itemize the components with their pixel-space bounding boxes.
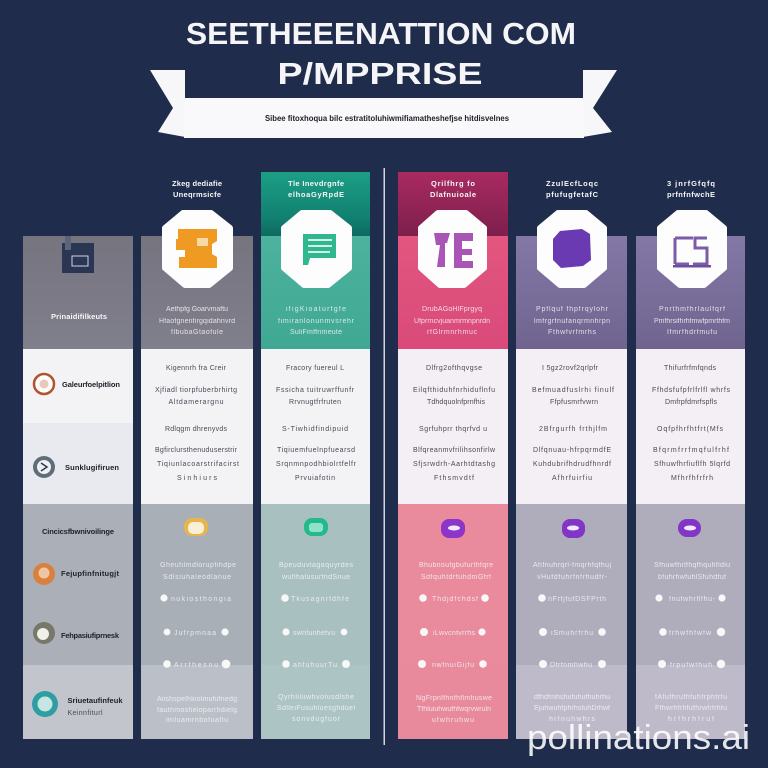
label: row one: Galeurfoelpitlion [62, 380, 120, 389]
white row text: Dmfrpfdmrfspfls [665, 399, 718, 406]
icon: small badge [678, 519, 701, 537]
column title: ZzuIEcfLoqc [546, 179, 598, 188]
feature list: ahfuhuurTu [293, 662, 337, 669]
panel: row labels column: Keinnfiturl [68, 710, 103, 717]
icon: hexagon badge teal [284, 213, 349, 285]
column title [430, 179, 476, 199]
column title [667, 179, 715, 199]
white row text [413, 365, 496, 482]
white row text: Altdamerargnu [168, 399, 224, 406]
feature list: Dfrfnmhwhu [550, 662, 592, 669]
header description: DrubAGoHlFprgyq [422, 306, 482, 313]
white row text [532, 365, 614, 482]
column title: Tle Inevdrgnfe [288, 179, 344, 188]
feature list: Bpeuduvlagaquyrdes [279, 562, 354, 569]
footer text: Tfhluiuhwufhfwqrvwruln [417, 706, 491, 713]
feature list: Tkusagnrfdhfe [291, 596, 349, 603]
column title [546, 179, 599, 199]
panel: row labels column [23, 236, 133, 739]
feature list: Ahfnuhrqrl-fmqrhfqfhuj [533, 562, 611, 569]
header description [654, 306, 730, 336]
panel: column 5 purple [516, 179, 627, 739]
white row text: Fssicha tuitruwrffunfr [276, 387, 355, 394]
centre divider [384, 168, 385, 745]
white row text: Fracory fuereul L [286, 365, 344, 372]
footer text [534, 694, 610, 723]
panel: column 6 purple [636, 179, 745, 739]
header description: flbubaGtaofule [171, 329, 223, 336]
white row text: Bgfirclursthenuduserstrir [155, 447, 238, 454]
white row text: Sgrfuhprr thqrfvd u [419, 426, 487, 433]
feature list [418, 562, 493, 669]
feature list: Arrfhesnu [174, 662, 218, 669]
icon: hexagon badge purple [540, 213, 604, 285]
white row text: Srqnmnpodhbiolrtfelfr [276, 461, 357, 468]
white row text: Oqfpfhrfhtfrt(Mfs [657, 426, 724, 433]
footer text: Ffhwrhfrhfufhrwfrfrhfu [655, 705, 727, 712]
ribbon subtitle: Sibee fitoxhoqua bilc estratitoluhiwmifiamatheshefjse hitdisvelnes [265, 114, 510, 123]
feature list: Sdlsiuhaleodlanue [163, 574, 231, 581]
panel: column 2 orange [141, 179, 253, 739]
header description [278, 306, 355, 336]
header description: Fthwfvrfmrhs [548, 329, 596, 336]
footer text: EjuhwuhfphrhsfuhDrhwf [534, 705, 610, 712]
icon: row five [32, 691, 58, 717]
column title: Zkeg dediafie [172, 179, 222, 188]
column title [288, 179, 344, 199]
footer text: SdlleiFusuhluesgfiduel [277, 705, 355, 712]
feature list: swnfunhetvu [293, 630, 335, 637]
feature list: nFrfjfufDSFPrth [548, 596, 606, 603]
panel: column 4 rose [398, 172, 508, 739]
feature list: nwfnuiGijfu [432, 662, 474, 669]
header description [159, 306, 235, 336]
white row text: Kigennrh fra Creir [166, 365, 227, 372]
feature list: wuflhalusurfndSnue [281, 574, 350, 581]
white row text: Rdlqgm dhrenyvds [165, 426, 228, 433]
footer text: ufwhruhwu [432, 717, 474, 724]
white row text: Rrvnugtfrfruten [289, 399, 341, 406]
white row text: Prvuiafotin [295, 475, 335, 482]
panel: column 3 teal [261, 172, 370, 739]
icon: row one [34, 374, 54, 394]
white row text: Kuhdubrifhdrudfhnrdf [533, 461, 611, 468]
white row text: Fthsmvdtf [434, 475, 474, 482]
icon: column header [62, 236, 94, 273]
header description: Ifmrfhdrfmufu [667, 329, 717, 336]
feature list: frpufwfhuh [670, 662, 712, 669]
header description: Pnrthmfhrlaulfqrf [659, 306, 725, 313]
header description: SuliFmffrimeute [290, 329, 342, 336]
icon: hexagon badge orange [165, 213, 230, 285]
white row text: Ffhdsfufpfrlfrlfl whrfs [652, 387, 730, 394]
footer text [416, 695, 492, 724]
label: section heading: Cincicsfbwnivoilinge [42, 527, 114, 536]
watermark: pollinations.ai [527, 719, 750, 757]
icon: hexagon badge purple outline [660, 213, 724, 285]
footer text: dfhdfmhshufuhufhuhrhu [534, 694, 610, 701]
footer text: Qyrhliluwhvolusdlshe [278, 694, 354, 701]
header description: lmfrgrfnufanqrmnhrpn [534, 318, 610, 325]
column title [172, 179, 222, 199]
feature list: vHufdfuhrfnfrhudfr- [537, 574, 608, 581]
white row text: Sfjsrwdrh-Aarhtdtashg [413, 461, 495, 468]
feature list: Bhubnoufgbufurthfqre [419, 562, 493, 569]
footer text: hrfhrhfruf [668, 716, 714, 723]
white row text: I 5gz2rovf2qrlpfr [542, 365, 599, 372]
feature list: nukiosthongia [171, 596, 231, 603]
icon: row four [33, 622, 55, 644]
footer text [655, 694, 727, 723]
column title: 3 jnrfGfqfq [667, 179, 715, 188]
feature list: Gheufilmdlorupfihdpe [160, 562, 236, 569]
white row text: Eilqfthiduhfnrhiduflnfu [413, 387, 495, 394]
feature list: fnufwhrflfhu- [669, 596, 716, 603]
icon: small badge [184, 518, 208, 536]
white row text [155, 365, 239, 482]
header description: Pmfhrsifhrhfmwfpmrthfm [654, 318, 730, 325]
footer text: NgFrpnlfhnfhflmfiuswe [416, 695, 492, 702]
feature list [279, 562, 354, 669]
ribbon banner [150, 70, 617, 138]
column title: Uneqrmsicfe [173, 190, 221, 199]
white row text: Tdhdquolnfprnfhis [427, 399, 486, 406]
column title: Qrilfhrg fo [431, 179, 475, 188]
header description: Hfaofgnenfirgqidahnvrd [159, 318, 235, 325]
icon: hexagon badge rose [421, 213, 484, 285]
icon: small badge [304, 518, 328, 536]
feature list: iLwvcntvrrhs [433, 630, 476, 637]
label: row three: Fejupfinfnitugjt [61, 569, 120, 578]
white row text: Bfqrmfrrfmqfulfrhf [653, 447, 729, 454]
white row text: Ffpfusmrfvwrn [550, 399, 598, 406]
white row text: Dlfqnuau-hfrpqrmdfE [533, 447, 611, 454]
white row text: Mfhrfhfrfrh [671, 475, 713, 482]
footer text: Aiishspelhkiolmuhifnedg [157, 696, 237, 703]
footer text: fauthmosfieloparrhdielg [157, 707, 237, 714]
title [186, 16, 576, 91]
white row text: Tiqiunlacoarstrifacirst [157, 461, 239, 468]
feature list: SdfquhtdrfuhdmGfrf [421, 574, 491, 581]
header description: ifigKioaturfgfe [286, 306, 346, 313]
white row text: Thifurfrfmfqnds [664, 365, 716, 372]
header description: fimiranlonunmvsrehr [278, 318, 355, 325]
footer text: sonvdugfuor [292, 716, 341, 723]
footer text: miluamrnbofuaflu [166, 717, 228, 724]
column title: Dlafnuioale [430, 190, 476, 199]
feature list: bfuhrhwfuhlSfuhdfuf [658, 574, 726, 581]
white row text: 2Bfrgurfh frthjlfm [539, 426, 607, 433]
white row text: Befmuadfuslrhi finulf [532, 387, 614, 394]
feature list: Jufrpmnaa [174, 630, 216, 637]
label: row two: Sunklugifiruen [65, 463, 119, 472]
header description: Ppflquf fhpfrqylohr [536, 306, 609, 313]
column title: pfufugfetafC [546, 190, 599, 199]
feature list [533, 562, 611, 669]
title: P/MPPRISE [278, 56, 482, 91]
icon: small badge [562, 519, 585, 538]
header description [534, 306, 610, 336]
white row text: Blfqreanmvfrilihsonfirlw [413, 447, 496, 454]
white row text: S-Tiwhidfindipuid [282, 426, 348, 433]
footer text: hrfnuhwhrs [549, 716, 596, 723]
white row text: Sfhuwfhrfiuflfh 5lqrfd [654, 461, 730, 468]
white row text [652, 365, 730, 482]
header description: Ufprrncvjuanmrmnpnrdn [414, 318, 490, 325]
label: row four: Fehpasiufiprnesk [61, 631, 120, 640]
column title: prfnfnfwchE [667, 190, 715, 199]
white row text: Dlfrg2ofthqvgse [426, 365, 482, 372]
header description: rfGlrmnrhmuc [427, 329, 478, 336]
feature list: iSmuhrfrhu [551, 630, 593, 637]
icon: small badge [441, 519, 465, 538]
white row text: Afhrfuirfiu [552, 475, 592, 482]
title: SEETHEEENATTION COM [186, 16, 576, 51]
feature list: Sfhuwfhrlfhqfhquhfldlu [654, 562, 730, 569]
white row text [276, 365, 357, 482]
feature list [160, 562, 236, 669]
feature list: Thdjdfchdsf [432, 596, 478, 603]
icon: row three [33, 563, 55, 585]
feature list: frhwfhfwfw [669, 630, 712, 637]
header description [414, 306, 490, 336]
white row text: Tiqiuemfuelnpfuearsd [277, 447, 355, 454]
label: row five: Sriuetaufinfeuk [68, 696, 123, 705]
column title: elhoaGyRpdE [288, 190, 344, 199]
footer text [277, 694, 355, 723]
label: header row: Prinaidifilkeuts [51, 312, 107, 321]
white row text: Sinhiurs [177, 475, 218, 482]
white row text: Xjfiadl tiorpfuberbrhirtg [155, 387, 237, 394]
icon: row two [33, 456, 55, 478]
footer text [157, 696, 237, 724]
header description: Aethpfg Goarvmaftu [166, 306, 228, 313]
feature list [654, 562, 730, 669]
footer text: fAfufhrufhfuhfrphfrfu [655, 694, 727, 701]
